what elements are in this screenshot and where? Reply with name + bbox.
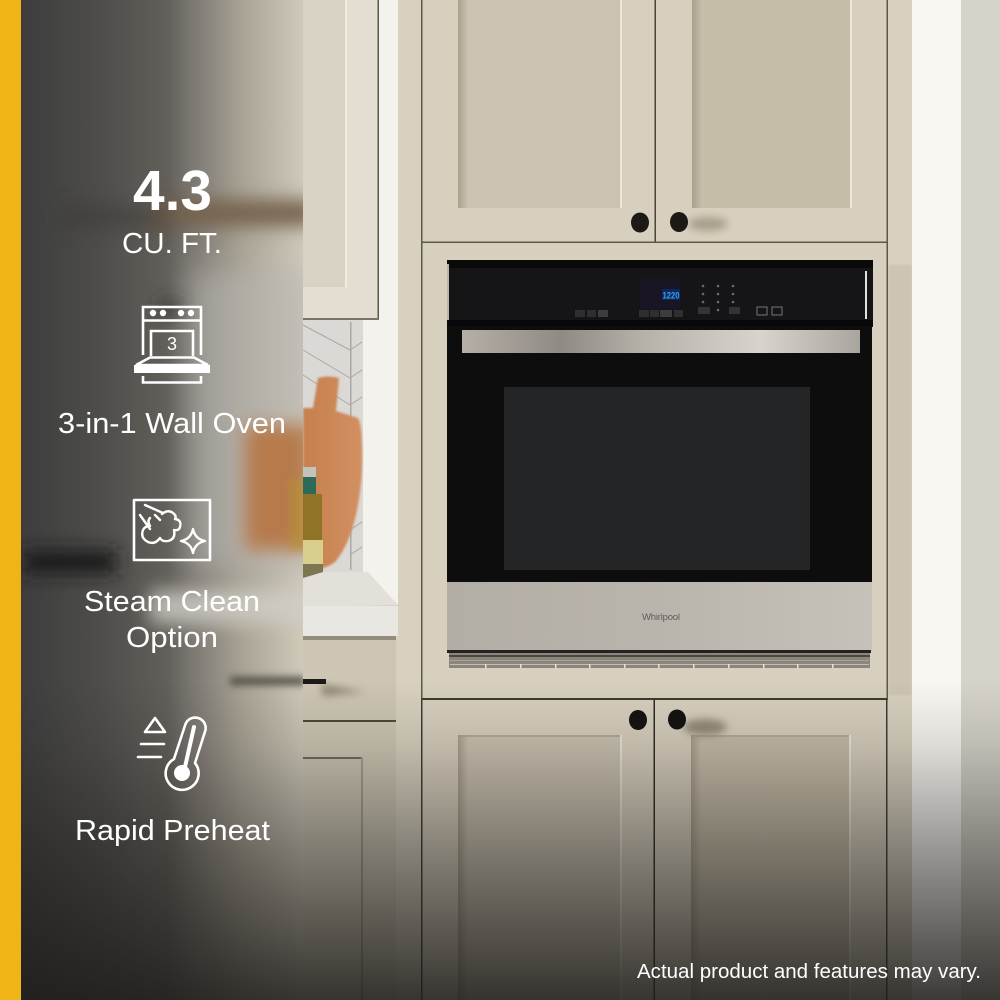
icon: oven — [134, 307, 210, 382]
countertop — [303, 572, 398, 636]
tile backsplash — [303, 320, 363, 572]
oven handle — [462, 330, 860, 353]
panel: lower cabinet left door — [422, 699, 654, 1000]
panel: wall oven — [447, 260, 873, 668]
lower drawer — [303, 636, 396, 720]
panel: upper cabinet right door — [421, 0, 888, 700]
oven door — [447, 326, 872, 582]
touch keys — [575, 285, 782, 317]
panel: frosted blur sidebar — [21, 0, 320, 1000]
icon: oven: 3 — [167, 334, 177, 354]
icon: rapid preheat thermometer — [138, 718, 206, 790]
display readout — [640, 279, 680, 309]
icon: steam clean — [134, 500, 210, 560]
white side panel — [363, 320, 398, 605]
panel: right wall and trim — [378, 0, 1000, 1000]
steel kick panel — [447, 582, 872, 651]
display readout: 1220 — [662, 290, 680, 302]
stat: 4.3 cu. ft.: 4.3 — [133, 159, 212, 223]
icon: upper cabinet knobs — [631, 212, 728, 232]
cutting board — [303, 376, 362, 571]
panel: oven surround — [422, 243, 886, 698]
panel: kitchen niche — [303, 0, 398, 1000]
label: rapid preheat: Rapid Preheat — [75, 815, 270, 847]
bottom vent — [447, 650, 871, 668]
disclaimer: Actual product and features may vary. — [637, 961, 981, 983]
label: 3-in-1 wall oven: 3-in-1 Wall Oven — [58, 408, 286, 440]
accent bar — [0, 0, 21, 1000]
brand logo: Whirlpool — [642, 612, 680, 623]
panel: lower cabinet right door — [421, 698, 888, 1000]
label: steam clean option: Steam Clean — [84, 586, 260, 618]
panel: upper cabinet left door — [422, 0, 655, 243]
label: steam clean option: Option — [126, 622, 218, 654]
oven control panel — [447, 260, 873, 327]
lower door — [303, 720, 396, 1000]
oven window — [504, 387, 810, 570]
olive oil bottle — [303, 467, 323, 579]
overlay: bottom shade — [21, 680, 1000, 1000]
upper left cabinet — [303, 0, 378, 319]
stat: 4.3 cu. ft.: CU. FT. — [122, 228, 222, 260]
stat: 4.3 cu. ft. — [122, 159, 222, 260]
label: steam clean option — [84, 586, 260, 654]
icon: lower cabinet knobs — [629, 710, 727, 735]
